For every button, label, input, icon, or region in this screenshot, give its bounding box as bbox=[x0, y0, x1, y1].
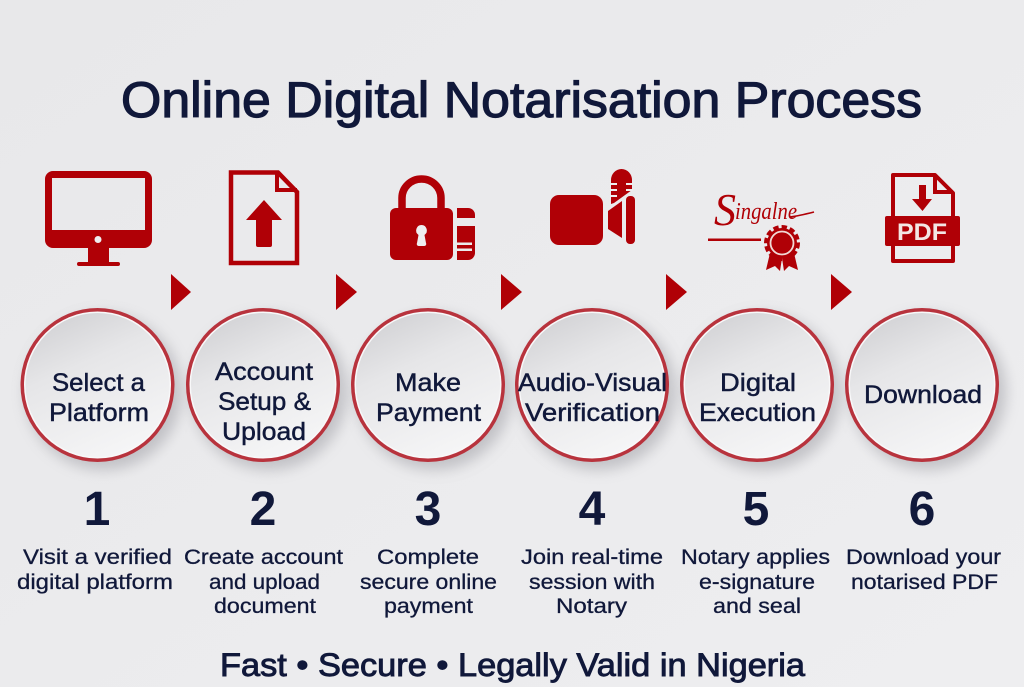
circle label 1 bbox=[49, 369, 149, 427]
description 5: e-signature bbox=[699, 571, 815, 594]
arrow 4 bbox=[666, 274, 687, 310]
number 3: 3 bbox=[415, 483, 441, 536]
step 4: audio-visual verification bbox=[515, 169, 676, 618]
icon: desktop monitor bbox=[45, 171, 152, 266]
description 2: Create account bbox=[184, 546, 343, 569]
step circle 2 bbox=[186, 308, 347, 470]
description 4 bbox=[521, 546, 663, 618]
circle label 6: Download bbox=[864, 381, 982, 409]
icon: document upload bbox=[231, 172, 297, 263]
title: Online Digital Notarisation Process bbox=[121, 72, 922, 128]
circle label 4: Verification bbox=[525, 399, 660, 427]
circle label 5: Digital bbox=[720, 369, 796, 397]
arrow 1 bbox=[171, 274, 191, 310]
arrow 3 bbox=[501, 274, 522, 310]
description 2: document bbox=[214, 595, 316, 618]
description 5 bbox=[681, 546, 830, 618]
step circle 4 bbox=[515, 308, 676, 470]
circle label 2: Account bbox=[215, 358, 313, 386]
description 3: Complete bbox=[377, 546, 479, 569]
circle label 5: Execution bbox=[699, 399, 816, 427]
circle label 4: Audio-Visual bbox=[518, 369, 667, 397]
description 3: payment bbox=[384, 595, 473, 618]
icon: signature and seal: ingalne bbox=[735, 199, 797, 225]
step 5: digital execution bbox=[680, 184, 841, 618]
description 6: Download your bbox=[846, 546, 1001, 569]
circle label 2: Upload bbox=[222, 418, 306, 446]
description 4: Notary bbox=[556, 595, 628, 618]
circle label 2: Setup & bbox=[218, 388, 311, 416]
icon: padlock with card bbox=[390, 179, 475, 260]
description 2: and upload bbox=[209, 571, 320, 594]
description 3 bbox=[360, 546, 497, 618]
number 1: 1 bbox=[84, 483, 110, 536]
description 6: notarised PDF bbox=[851, 571, 998, 594]
description 2 bbox=[184, 546, 343, 618]
circle label 3 bbox=[376, 369, 481, 427]
step 3: make payment bbox=[351, 179, 512, 618]
step circle 6 bbox=[845, 308, 1006, 470]
arrow 2 bbox=[336, 274, 357, 310]
icon: signature and seal: S bbox=[714, 184, 736, 235]
description 1: digital platform bbox=[17, 571, 173, 594]
step 2: account setup and upload bbox=[184, 172, 347, 618]
circle label 2 bbox=[215, 358, 313, 446]
icon: video camera and microphone bbox=[550, 169, 635, 245]
step 6: download bbox=[845, 175, 1006, 594]
description 1 bbox=[17, 546, 173, 594]
step circle 1 bbox=[20, 308, 182, 470]
description 1: Visit a verified bbox=[23, 546, 172, 569]
circle label 4 bbox=[518, 369, 667, 427]
step circle 3 bbox=[351, 308, 512, 470]
number 6: 6 bbox=[909, 483, 935, 536]
description 3: secure online bbox=[360, 571, 497, 594]
footer tagline: Fast • Secure • Legally Valid in Nigeria bbox=[220, 647, 805, 683]
icon: PDF download: PDF bbox=[897, 219, 947, 246]
circle label 3: Make bbox=[395, 369, 461, 397]
description 4: session with bbox=[529, 571, 655, 594]
step circle 5 bbox=[680, 308, 841, 470]
arrow 5 bbox=[831, 274, 852, 310]
number 5: 5 bbox=[743, 483, 769, 536]
number 4: 4 bbox=[579, 483, 606, 536]
description 5: Notary applies bbox=[681, 546, 830, 569]
circle label 1: Select a bbox=[52, 369, 145, 397]
number 2: 2 bbox=[250, 483, 276, 536]
description 4: Join real-time bbox=[521, 546, 663, 569]
icon: PDF download bbox=[885, 175, 960, 261]
circle label 1: Platform bbox=[49, 399, 149, 427]
step 1: select a platform bbox=[17, 171, 182, 594]
description 6 bbox=[846, 546, 1001, 594]
description 5: and seal bbox=[713, 595, 801, 618]
icon: signature and seal bbox=[708, 184, 814, 271]
circle label 5 bbox=[699, 369, 816, 427]
circle label 3: Payment bbox=[376, 399, 481, 427]
